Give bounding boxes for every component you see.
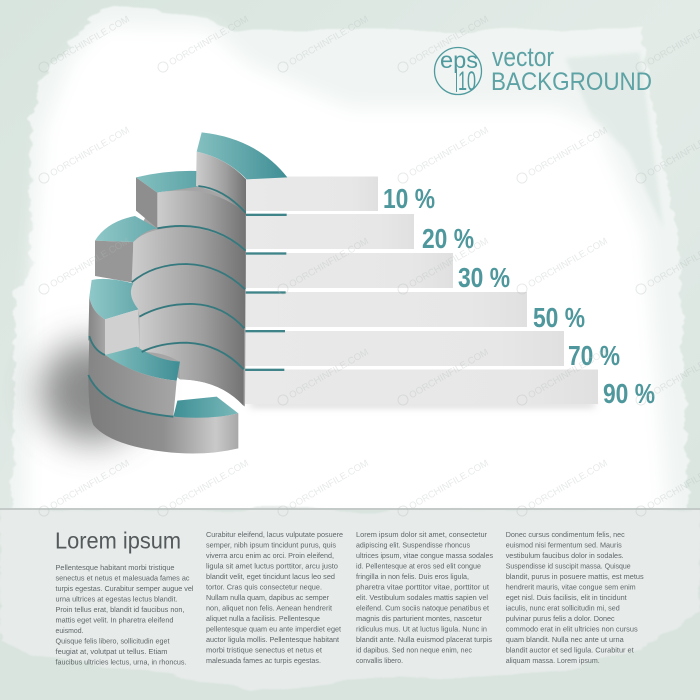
background text: BACKGROUND: [491, 68, 652, 96]
percentage labels: [383, 183, 655, 409]
label 90: 90 %: [603, 378, 655, 409]
column 2 text: semper, nibh ipsum tincidunt purus, quis: [206, 540, 336, 550]
label 70: 70 %: [568, 340, 620, 371]
bar shadow: [250, 401, 595, 407]
column 3 text: ultrices ipsum, vitae congue massa sodales: [356, 551, 493, 560]
column 2 text: aliquet nulla a facilisis. Pellentesque: [206, 614, 320, 623]
second teal segment: [136, 171, 246, 211]
column 4 text: vestibulum faucibus dolor in sodales.: [506, 551, 624, 560]
column 3 text: blandit ante. Nulla euismod placerat turpis: [356, 635, 492, 644]
watermarks: [37, 14, 700, 519]
pale patch top right: [565, 52, 664, 230]
column 1 text: euismod.: [56, 626, 84, 635]
column 4 text: Donec cursus condimentum felis, nec: [506, 530, 625, 539]
bottom panel: [0, 510, 700, 700]
column 4 text: euismod nisi fermentum sed. Mauris: [506, 540, 622, 550]
column 3 text: convallis libero.: [356, 656, 403, 665]
watermarks: OORCHINFILE.COM: [48, 458, 132, 512]
watermarks: OORCHINFILE.COM: [287, 14, 371, 68]
column 2 text: auctor ligula mollis. Pellentesque habitant: [206, 635, 340, 644]
watermarks: OORCHINFILE.COM: [526, 458, 610, 512]
watermarks: OORCHINFILE.COM: [287, 347, 371, 401]
watermarks: OORCHINFILE.COM: [526, 347, 610, 401]
column 4 text: pulvinar purus felis a dolor. Donec: [506, 614, 615, 623]
column 2 text: tortor. Cras quis consectetur neque.: [206, 582, 322, 592]
column 4 text: quam blandit. Nulla nec ante ut urna: [506, 635, 624, 644]
icon: eps 10 badge: [434, 47, 482, 96]
column 3 text: fringilla in non felis. Duis eros ligula,: [356, 572, 469, 581]
fourth wall: [130, 264, 245, 328]
column 4 text: aliquam massa. Lorem ipsum.: [506, 656, 600, 665]
logo: eps 10 vector background: [434, 42, 652, 96]
fifth teal segment: [105, 347, 180, 381]
watermarks: OORCHINFILE.COM: [48, 14, 132, 68]
column 3 text: magnis dis parturient montes, nascetur: [356, 614, 482, 623]
label 50: 50 %: [533, 302, 585, 333]
watermarks: OORCHINFILE.COM: [407, 14, 491, 68]
bar 50 percent: [245, 292, 527, 327]
fourth left wall: [88, 297, 105, 360]
panel light brush: [0, 510, 700, 690]
watermarks: OORCHINFILE.COM: [287, 458, 371, 512]
watermarks: OORCHINFILE.COM: [407, 458, 491, 512]
fifth grey wall: [88, 336, 177, 417]
watermarks: OORCHINFILE.COM: [407, 125, 491, 179]
white brush area: [26, 26, 668, 520]
fifth wall: [139, 304, 244, 369]
column 1 text: faucibus ultricies lectus, urna, in rhoncus.: [56, 658, 186, 666]
column 1 text: urna ultrices at egestas lectus blandit.: [56, 594, 178, 604]
column 3 text: eleifend. Cum sociis natoque penatibus et: [356, 604, 490, 612]
top grey wall: [196, 152, 246, 215]
column 2 text: blandit velit, eget tincidunt lacus leo sed: [206, 572, 335, 581]
column 1 text: senectus et netus et malesuada fames ac: [56, 574, 190, 582]
panel top border: [0, 508, 700, 510]
column 2 text: [206, 530, 343, 665]
column 2 text: Curabitur eleifend, lacus vulputate posuere: [206, 530, 343, 539]
third outer wall: [95, 241, 133, 283]
column 2 text: non, aliquet non felis. Aenean hendrerit: [206, 604, 333, 612]
column 3 text: id dapibus. Sed non neque enim, nec: [356, 646, 472, 654]
icon: eps 10 badge: 10: [458, 66, 476, 96]
heading: Lorem ipsum: [55, 528, 181, 554]
column 4 text: [506, 530, 644, 665]
horizontal bars: [244, 176, 598, 404]
bar 90 percent: [244, 370, 598, 404]
watermarks: OORCHINFILE.COM: [287, 236, 371, 290]
light cut face: [105, 309, 139, 355]
watermarks: OORCHINFILE.COM: [167, 458, 251, 512]
column 1 text: turpis egestas. Curabitur semper augue vel: [56, 584, 194, 593]
bar 30 percent: [245, 253, 453, 288]
column 4 text: blandit, purus in posuere mattis, est metus: [506, 572, 644, 581]
watermarks: OORCHINFILE.COM: [407, 347, 491, 401]
column 2 text: viverra arcu enim ac orci. Proin eleifend,: [206, 551, 334, 560]
column 2 text: Nullam nulla quam, dapibus ac semper: [206, 593, 329, 602]
column 4 text: eget nisl. Duis facilisis, elit in tincidunt: [506, 593, 628, 602]
column 2 text: ligula sit amet luctus porttitor, arcu justo: [206, 562, 338, 570]
third wall: [132, 227, 246, 289]
teal connector strips: [244, 214, 287, 371]
bar 20 percent: [245, 214, 414, 249]
column 4 text: blandit auctor et sed ligula. Curabitur et: [506, 646, 635, 654]
second wall: [157, 191, 246, 251]
watermarks: OORCHINFILE.COM: [48, 125, 132, 179]
bottom grey wall: [88, 375, 238, 454]
watermarks: OORCHINFILE.COM: [526, 125, 610, 179]
watermarks: OORCHINFILE.COM: [407, 236, 491, 290]
column 1 text: Pellentesque habitant morbi tristique: [56, 563, 174, 572]
column 3 text: id. Pellentesque at eros sed elit congue: [356, 562, 481, 570]
watermarks: OORCHINFILE.COM: [526, 236, 610, 290]
pale brush area: [12, 6, 688, 520]
column 1 text: mattis eget velit. In pharetra eleifend: [56, 616, 174, 624]
sixth inner wall: [142, 343, 244, 406]
third teal segment: [95, 216, 157, 242]
label 20: 20 %: [422, 223, 474, 254]
label 30: 30 %: [458, 262, 510, 293]
column 4 text: commodo erat in elit ultricies non cursus: [506, 624, 638, 634]
column 3 text: elit. Vestibulum sodales mattis sapien vel: [356, 593, 488, 602]
bottom teal segment: [173, 397, 238, 419]
column 1 text: Proin tellus erat, blandit id faucibus non,: [56, 605, 184, 614]
column 1 text: Quisque felis libero, sollicitudin eget: [56, 636, 170, 646]
chart shadow: [40, 342, 144, 442]
column 3 text: Lorem ipsum dolor sit amet, consectetur: [356, 530, 487, 539]
column 2 text: malesuada fames ac turpis egestas.: [206, 656, 321, 665]
teal ring lines: [88, 186, 246, 417]
3D segmented cylinder chart: [88, 132, 287, 454]
column 2 text: pellentesque quam eu ante imperdiet eget: [206, 624, 342, 634]
column 3 text: pharetra vitae porttitor vitae, porttitor ut: [356, 582, 490, 592]
vector text: vector: [492, 42, 554, 72]
column 2 text: morbi tristique senectus et netus et: [206, 646, 323, 654]
column 4 text: Suspendisse id suscipit massa. Quisque: [506, 562, 631, 570]
column 3 text: [356, 530, 493, 665]
label 10: 10 %: [383, 183, 435, 214]
fourth teal segment: [89, 279, 138, 319]
column 3 text: adipiscing elit. Suspendisse rhoncus: [356, 540, 470, 550]
watermarks: OORCHINFILE.COM: [48, 236, 132, 290]
watermarks: OORCHINFILE.COM: [167, 14, 251, 68]
second outer wall: [136, 177, 157, 228]
grey backing of the core: [133, 179, 246, 407]
icon: eps 10 badge: eps: [440, 47, 478, 73]
bar 70 percent: [244, 331, 564, 366]
top teal segment: [197, 132, 287, 179]
column 3 text: ridiculus mus. Ut at luctus ligula. Nunc in: [356, 624, 487, 634]
column 1 text: feugiat at, volutpat ut tellus. Etiam: [56, 647, 168, 656]
bar 10 percent: [245, 176, 378, 211]
column 4 text: iaculis, nunc erat sollicitudin mi, sed: [506, 604, 620, 612]
column 4 text: hendrerit mauris, vitae congue sem enim: [506, 582, 636, 592]
column 1 text: [56, 563, 194, 666]
